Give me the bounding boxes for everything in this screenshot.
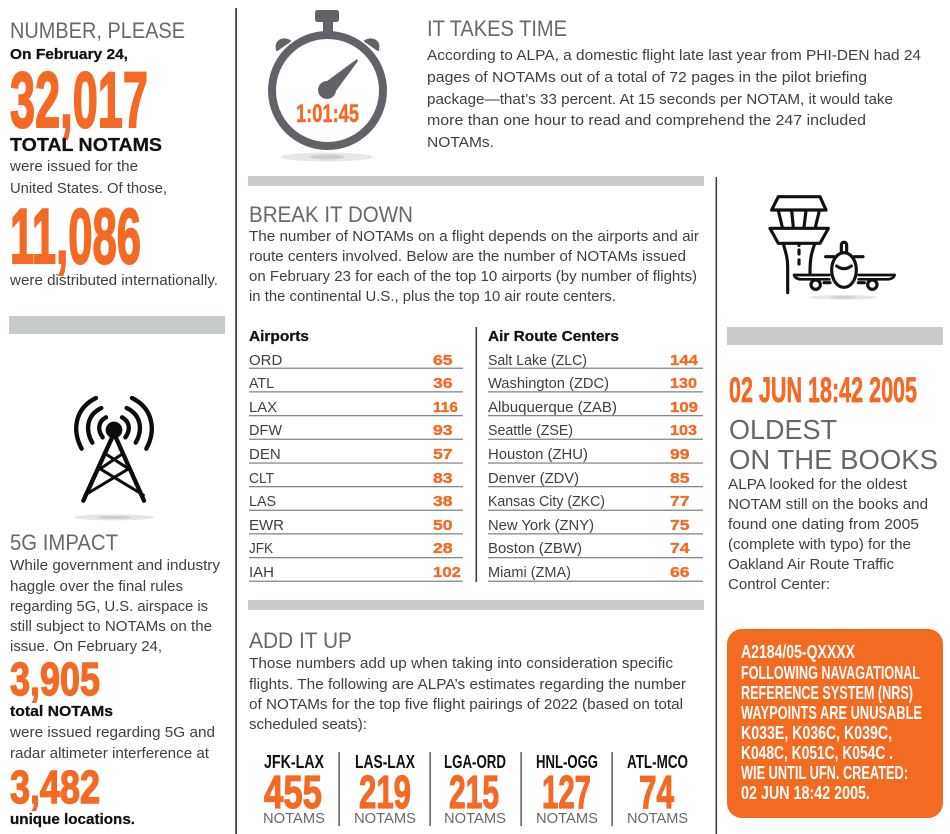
table: air route centers: 85	[670, 470, 690, 487]
stat: atl-mco	[627, 752, 688, 827]
table: airports: 93	[433, 422, 452, 439]
text: 5g intro: issue. On February 24,	[10, 638, 162, 655]
stat: 32,017: 32,017	[10, 55, 148, 144]
text: it takes time body: more than one hour to read and comprehend the 247 included	[427, 112, 866, 129]
table: air route centers: 74	[670, 540, 690, 557]
table: airports: DEN	[249, 446, 281, 463]
callout: oldest notam: K048C, K051C, K054C .	[741, 743, 893, 763]
stat: 3,482: 3,482	[10, 761, 100, 813]
text: on february 24: On February 24,	[10, 46, 128, 63]
table: airports: LAX	[249, 399, 277, 416]
panel: 5g impact	[9, 530, 220, 828]
text: radar altimeter interference	[9, 724, 215, 762]
divider bar: left column	[9, 316, 225, 334]
table: airports: 50	[433, 517, 452, 534]
stat: atl-mco: ATL-MCO	[627, 752, 688, 772]
table: airports: 116	[433, 399, 458, 416]
stat: jfk-lax: NOTAMS	[263, 810, 325, 827]
callout: oldest notam	[727, 629, 943, 818]
text: distributed internationally: were distributed internationally.	[9, 272, 218, 289]
divider bar: middle top	[248, 176, 704, 186]
text: it takes time body	[427, 47, 921, 151]
text: 5g intro: still subject to NOTAMs on the	[10, 618, 212, 635]
panel: number, please	[9, 18, 218, 289]
stopwatch time: 1:01:45	[296, 100, 359, 128]
table: airports: 38	[433, 493, 452, 510]
stat: jfk-lax	[263, 752, 325, 827]
text: 5g intro: While government and industry	[10, 557, 220, 574]
stat: lga-ord: NOTAMS	[444, 810, 506, 827]
heading: add it up: ADD IT UP	[249, 628, 352, 653]
divider bar: right column	[727, 327, 943, 345]
table: air route centers: Kansas City (ZKC)	[488, 493, 605, 510]
table: air route centers: Boston (ZBW)	[488, 540, 582, 557]
text: add it up body: Those numbers add up when taking into consideration specific	[249, 655, 674, 672]
stat: 3,905: 3,905	[10, 653, 100, 705]
text: add it up body: of NOTAMs for the top five flight pairings of 2022 (based on total	[249, 696, 683, 713]
text: radar altimeter interference: were issued regarding 5G and	[9, 724, 215, 741]
table: air route centers: Salt Lake (ZLC)	[488, 352, 587, 369]
table: air route centers: Denver (ZDV)	[488, 470, 579, 487]
table: airports: ORD	[249, 352, 282, 369]
stat: lga-ord: 215	[449, 766, 499, 818]
panel: break it down	[249, 202, 699, 305]
stat: las-lax: 219	[359, 766, 411, 818]
text: issued for the united states	[9, 158, 167, 197]
stat: 11,086: 11,086	[10, 192, 141, 280]
stat: las-lax	[354, 752, 416, 827]
table: air route centers: 99	[670, 446, 690, 463]
table: air route centers: 77	[670, 493, 690, 510]
text: add it up body	[249, 655, 686, 733]
heading: oldest on the books	[729, 414, 938, 475]
text: it takes time body: NOTAMs.	[427, 134, 494, 151]
callout: oldest notam: A2184/05-QXXXX	[741, 642, 855, 662]
text: add it up body: scheduled seats):	[249, 716, 367, 733]
table: airports: 83	[433, 470, 452, 487]
table: air route centers: 75	[670, 517, 690, 534]
table: air route centers: Albuquerque (ZAB)	[488, 399, 617, 416]
text: oldest body: ALPA looked for the oldest	[728, 476, 908, 493]
text: oldest body: NOTAM still on the books and	[728, 496, 928, 513]
text: add it up body: flights. The following are ALPA’s estimates regarding the number	[249, 676, 686, 693]
stat: jfk-lax: JFK-LAX	[264, 752, 324, 772]
text: radar altimeter interference: radar altimeter interference at	[10, 745, 210, 762]
table: air route centers: 66	[670, 564, 690, 581]
table: airports: LAS	[249, 493, 276, 510]
heading: 5g impact: 5G IMPACT	[10, 530, 118, 555]
label: unique locations: unique locations.	[10, 811, 135, 828]
stat: hnl-ogg	[536, 752, 598, 827]
text: oldest body: Control Center:	[728, 576, 830, 593]
table: airports: EWR	[249, 517, 284, 534]
table: airports: DFW	[249, 422, 283, 439]
table: airports: ATL	[249, 375, 274, 392]
table: air route centers: 103	[670, 422, 697, 439]
text: break it down body: on February 23 for each of the top 10 airports (by number of flights)	[249, 268, 697, 285]
icon: cell tower	[74, 398, 154, 520]
table: air route centers: Washington (ZDC)	[488, 375, 609, 392]
stat: lga-ord: LGA-ORD	[444, 752, 506, 772]
text: break it down body: route centers involved. Below are the number of NOTAMs issued	[249, 248, 686, 265]
text: issued for the united states: were issued for the	[9, 158, 138, 175]
heading: oldest on the books: OLDEST	[729, 414, 837, 445]
table: air route centers: Miami (ZMA)	[488, 564, 571, 581]
panel: oldest on the books	[728, 371, 938, 593]
label: total notams: total NOTAMs	[10, 703, 113, 720]
stat: atl-mco: NOTAMS	[627, 810, 688, 827]
table heading: air route centers: Air Route Centers	[488, 328, 619, 345]
table: air route centers: 144	[670, 352, 699, 369]
text: break it down body: The number of NOTAMs on a flight depends on the airports and air	[249, 228, 699, 245]
text: issued for the united states: United States. Of those,	[10, 180, 167, 197]
heading: break it down: BREAK IT DOWN	[249, 202, 413, 227]
icon: control tower and plane	[770, 197, 895, 300]
table: airports: JFK	[249, 540, 273, 557]
text: it takes time body: package—that’s 33 percent. At 15 seconds per NOTAM, it would take	[427, 91, 893, 108]
callout: oldest notam: 02 JUN 18:42 2005.	[741, 783, 870, 803]
icon: stopwatch	[272, 10, 383, 162]
stat: las-lax: NOTAMS	[354, 810, 416, 827]
stat: jfk-lax: 455	[264, 766, 322, 818]
text: 5g intro: regarding 5G, U.S. airspace is	[10, 598, 208, 615]
text: break it down body	[249, 228, 699, 305]
panel: add it up	[249, 628, 686, 733]
heading: oldest on the books: ON THE BOOKS	[729, 444, 938, 475]
text: oldest body: Oakland Air Route Traffic	[728, 556, 894, 573]
table: air route centers: Seattle (ZSE)	[488, 422, 573, 439]
table: air route centers: 130	[670, 375, 697, 392]
table: airports: 28	[433, 540, 452, 557]
table: air route centers	[488, 328, 703, 582]
text: it takes time body: According to ALPA, a domestic flight late last year from PHI-DEN had 24	[427, 47, 921, 64]
table: airports: IAH	[249, 564, 274, 581]
text: 5g intro	[10, 557, 220, 655]
table: airports: 57	[433, 446, 452, 463]
table: air route centers: New York (ZNY)	[488, 517, 594, 534]
table: air route centers: Houston (ZHU)	[488, 446, 588, 463]
table heading: airports: Airports	[249, 328, 309, 345]
text: oldest body: (complete with typo) for the	[728, 536, 911, 553]
text: it takes time body: pages of NOTAMs out of a total of 72 pages in the pilot briefing	[427, 69, 867, 86]
stat: atl-mco: 74	[639, 766, 674, 818]
callout: oldest notam: K033E, K036C, K039C,	[741, 723, 892, 743]
table: airports: 65	[433, 352, 452, 369]
text: break it down body: in the continental U.S., plus the top 10 air route centers.	[249, 288, 616, 305]
stat: lga-ord	[444, 752, 506, 827]
text: oldest body	[728, 476, 928, 593]
text: 5g intro: haggle over the final rules	[10, 578, 183, 595]
heading: it takes time: IT TAKES TIME	[427, 16, 567, 41]
table: airports: 36	[433, 375, 452, 392]
stat: hnl-ogg: 127	[542, 766, 591, 818]
stat: las-lax: LAS-LAX	[355, 752, 415, 772]
stat: hnl-ogg: NOTAMS	[536, 810, 598, 827]
table: airports	[249, 328, 463, 582]
stat: hnl-ogg: HNL-OGG	[536, 752, 598, 772]
label: total notams: TOTAL NOTAMS	[10, 135, 162, 155]
heading: number, please: NUMBER, PLEASE	[10, 18, 185, 43]
table: air route centers: 109	[670, 399, 698, 416]
divider bar: middle lower	[248, 600, 704, 610]
table: airports: CLT	[249, 470, 274, 487]
panel: it takes time	[427, 16, 921, 151]
table: airports: 102	[433, 564, 461, 581]
text: oldest body: found one dating from 2005	[728, 516, 919, 533]
